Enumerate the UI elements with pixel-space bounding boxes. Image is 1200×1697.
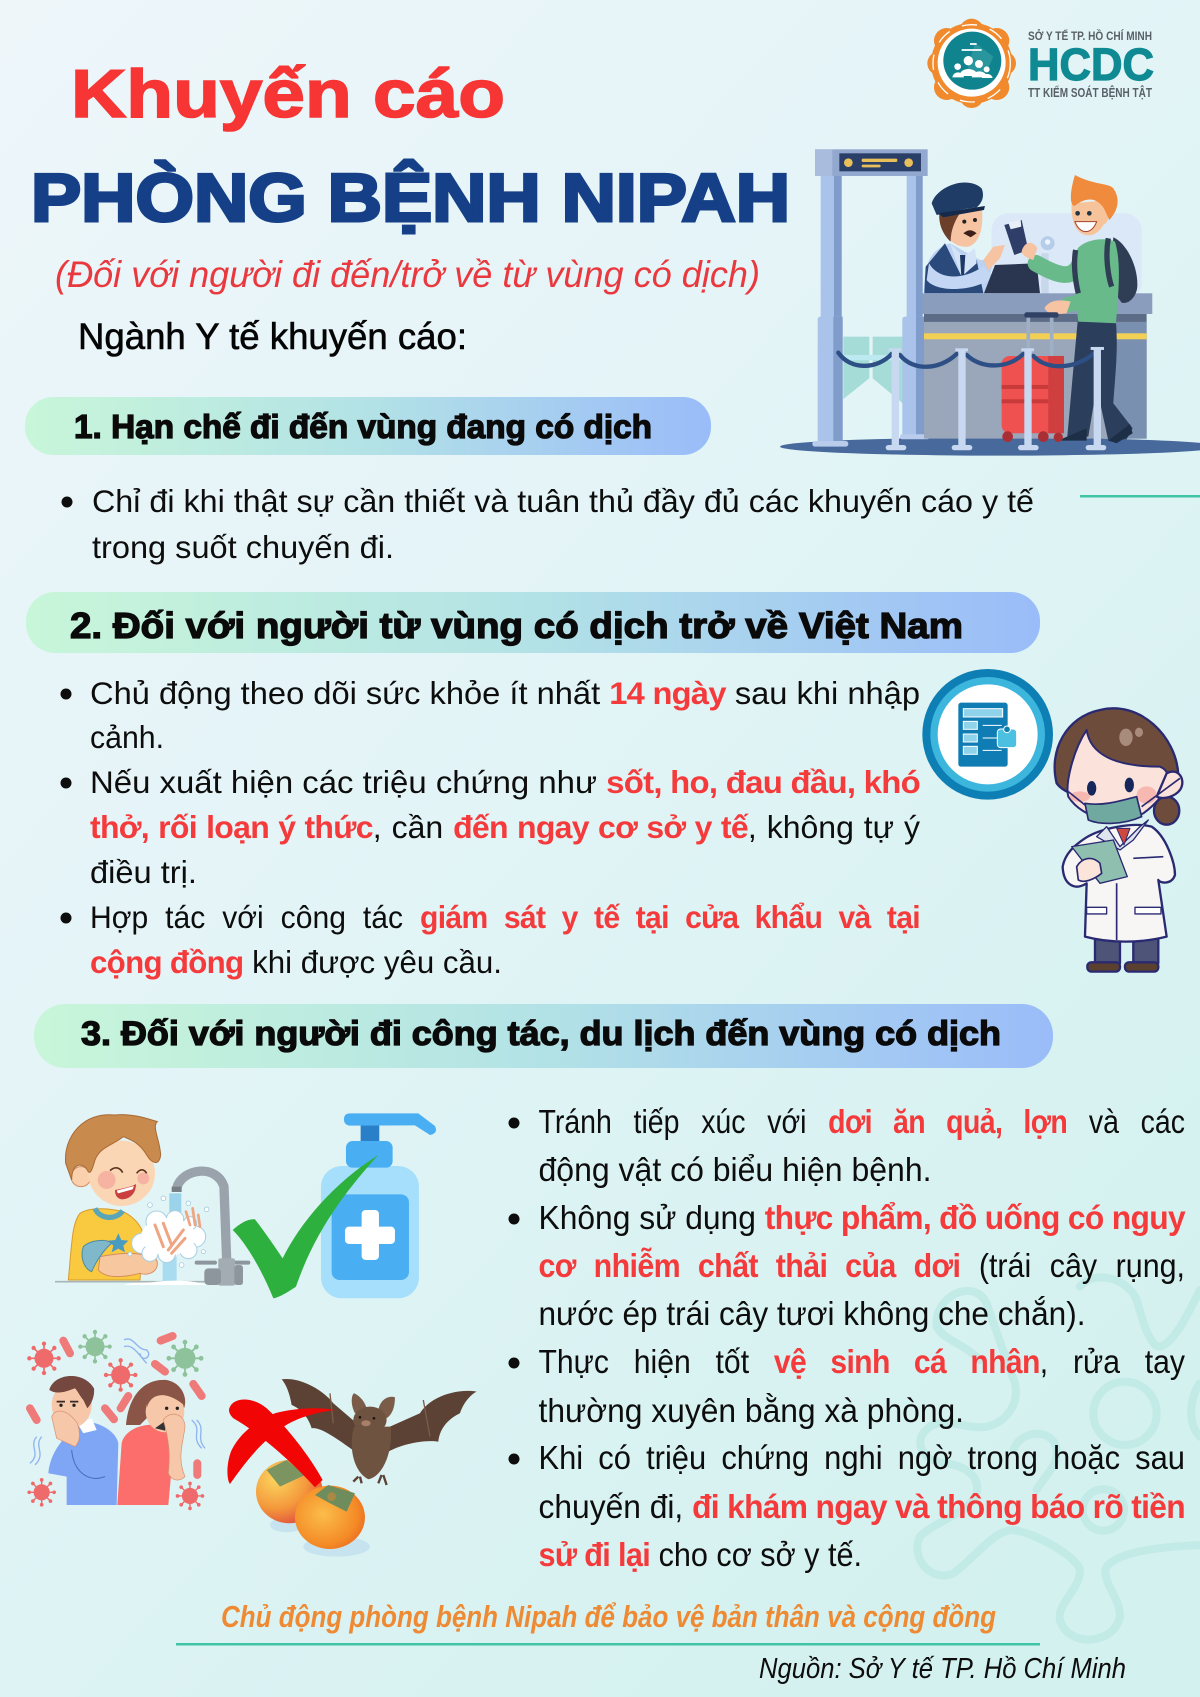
footer divider [176, 1643, 1040, 1646]
title: Khuyến cáo: Khuyến cáo [71, 56, 505, 132]
section 1 body text: trong suốt chuyến đi. [92, 529, 394, 565]
section 3 body text: nước ép trái cây tươi không che chắn). [538, 1295, 1086, 1332]
section 3 body text: cơ nhiễm chất thải của dơi (trái cây rụng, [538, 1247, 1185, 1284]
illustration: doctor with mask [1055, 708, 1182, 972]
illustration: airport checkpoint [780, 149, 1200, 456]
icon: checklist badge [922, 669, 1053, 800]
heading pill 2 [26, 592, 1040, 653]
section 1 body text: Chỉ đi khi thật sự cần thiết và tuân thủ đầy đủ các khuyến cáo y tế [92, 483, 1034, 519]
logo emblem [927, 19, 1016, 108]
section 2 body text: thở, rối loạn ý thức, cần đến ngay cơ sở y tế, không tự ý [90, 809, 920, 845]
illustration: sick people and viruses [28, 1331, 205, 1510]
logo: HCDC [927, 19, 1154, 108]
section 3 body text: Tránh tiếp xúc với dơi ăn quả, lợn và các [538, 1103, 1185, 1140]
heading pill 1 [25, 397, 711, 455]
logo text: TT KIỂM SOÁT BỆNH TẬT [1028, 85, 1152, 100]
section 2 body text: cộng đồng khi được yêu cầu. [90, 944, 502, 980]
section 2 body text: Hợp tác với công tác giám sát y tế tại cửa khẩu và tại [90, 899, 920, 935]
subtitle: (Đối với người đi đến/trở về từ vùng có dịch) [55, 254, 760, 295]
footer message: Chủ động phòng bệnh Nipah để bảo vệ bản thân và cộng đồng [221, 1599, 996, 1634]
section 3 body text [508, 1103, 1186, 1573]
heading pill 2: 2. Đối với người từ vùng có dịch trở về Việt Nam [70, 605, 963, 646]
heading pill 3: 3. Đối với người đi công tác, du lịch đến vùng có dịch [81, 1015, 1001, 1053]
section 3 body text: động vật có biểu hiện bệnh. [538, 1151, 932, 1188]
icon: green check mark [233, 1155, 378, 1298]
source credit: Nguồn: Sở Y tế TP. Hồ Chí Minh [759, 1653, 1126, 1685]
section 3 body text: Thực hiện tốt vệ sinh cá nhân, rửa tay [538, 1343, 1185, 1380]
illustration: bat [282, 1379, 477, 1485]
heading pill 1: 1. Hạn chế đi đến vùng đang có dịch [74, 408, 652, 445]
section 1 [25, 397, 1200, 565]
section 3 body text: chuyến đi, đi khám ngay và thông báo rõ tiền [538, 1488, 1185, 1525]
illustration: boy washing hands [55, 1115, 248, 1286]
section 3 body text: sử đi lại cho cơ sở y tế. [538, 1536, 862, 1573]
section 3 [28, 1004, 1186, 1573]
heading pill 3 [34, 1004, 1053, 1068]
illustration: persimmons [256, 1460, 370, 1557]
section 2 body text [60, 675, 920, 980]
title: PHÒNG BỆNH NIPAH: PHÒNG BỆNH NIPAH [31, 159, 790, 236]
section 2 body text: Chủ động theo dõi sức khỏe ít nhất 14 ngày sau khi nhập [90, 675, 920, 711]
logo text: HCDC [1028, 39, 1154, 90]
logo text [1028, 28, 1154, 100]
icon: red cross mark [227, 1400, 335, 1487]
lead-in text: Ngành Y tế khuyến cáo: [78, 316, 467, 357]
watermark: virus outline [917, 1277, 1200, 1640]
decorative teal line [1080, 495, 1200, 498]
illustration: soap bottle [321, 1113, 436, 1298]
traveller [1110, 237, 1137, 303]
section 2 body text: cảnh. [90, 719, 164, 755]
section 1 body text [62, 483, 1034, 565]
section 2 body text: Nếu xuất hiện các triệu chứng như sốt, ho, đau đầu, khó [90, 764, 920, 800]
logo text: SỞ Y TẾ TP. HỒ CHÍ MINH [1028, 28, 1152, 43]
section 3 body text: Không sử dụng thực phẩm, đồ uống có nguy [538, 1199, 1186, 1236]
section 2 body text: điều trị. [90, 854, 197, 890]
section 3 body text: thường xuyên bằng xà phòng. [538, 1392, 964, 1429]
section 2 [26, 592, 1182, 980]
